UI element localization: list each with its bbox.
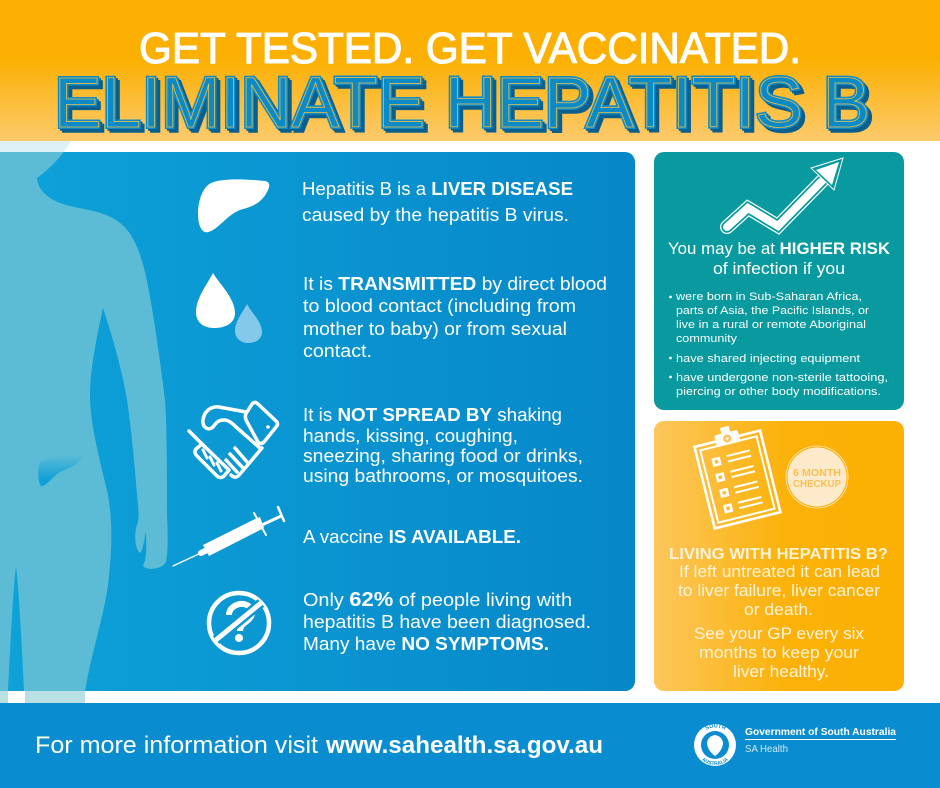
title: eliminate hepatitis B: ELIMINATE HEPATITIS B	[56, 66, 872, 145]
text: liver disease: Hepatitis B is a LIVER DISEASE	[302, 178, 573, 199]
badge: 6 month checkup	[786, 446, 848, 508]
logo: government of South Australia: Government of South Australia	[745, 726, 896, 738]
icon: handshake	[189, 402, 278, 478]
text: diagnosed	[303, 588, 591, 654]
text: living with hepatitis B: See your GP every six	[694, 625, 865, 643]
icon: no symptoms	[209, 593, 269, 653]
heading: higher risk: of infection if you	[713, 259, 845, 278]
text: living with hepatitis B	[669, 546, 888, 681]
body liver	[38, 455, 83, 486]
panel: main information	[0, 141, 635, 703]
logo: South Australia crest	[694, 724, 736, 766]
footer	[0, 703, 940, 788]
icon: blood drops	[196, 273, 262, 343]
list: risk factors: parts of Asia, the Pacific Islands, or	[676, 305, 869, 317]
text: living with hepatitis B: to liver failure, liver cancer	[678, 582, 881, 600]
logo: government of South Australia: SA Health	[745, 744, 788, 755]
headline: get tested: GET TESTED. GET VACCINATED.	[139, 24, 801, 73]
text: vaccine: A vaccine IS AVAILABLE.	[303, 526, 521, 547]
text: not spread by: using bathrooms, or mosquitoes.	[303, 465, 583, 486]
text: transmission: mother to baby) or from sexual	[303, 318, 567, 339]
text: liver disease: caused by the hepatitis B virus.	[302, 204, 569, 225]
text: transmission: to blood contact (including from	[303, 295, 576, 316]
text: living with hepatitis B: liver healthy.	[733, 663, 829, 681]
panel: living with hepatitis B	[654, 419, 904, 691]
text: more information: www.sahealth.sa.gov.au	[325, 732, 603, 759]
icon: clipboard	[692, 419, 780, 528]
text: not spread by: It is NOT SPREAD BY shaking	[303, 404, 562, 425]
text: not spread by: hands, kissing, coughing,	[303, 425, 518, 446]
text: living with hepatitis B: If left untreated it can lead	[679, 563, 880, 581]
title: eliminate hepatitis B: ELIMINATE HEPATITIS B	[54, 64, 870, 143]
logo: South Australia crest: AUSTRALIA	[702, 758, 728, 765]
icon: liver	[198, 179, 269, 232]
icon: syringe	[173, 507, 284, 566]
body silhouette	[0, 141, 168, 703]
list: risk factors	[669, 291, 888, 398]
text: diagnosed: Only 62% of people living with	[303, 588, 572, 611]
text: more information	[35, 732, 603, 759]
text: transmission	[303, 273, 607, 361]
text: more information: For more information visit	[35, 732, 318, 759]
heading: higher risk	[668, 239, 891, 278]
list: risk factors: have undergone non-sterile tattooing,	[676, 372, 888, 384]
text: not spread by: sneezing, sharing food or drinks,	[303, 445, 583, 466]
text: transmission: It is TRANSMITTED by direct blood	[303, 273, 607, 294]
list: risk factors: were born in Sub-Saharan Africa,	[675, 291, 862, 303]
text: not spread by	[303, 404, 583, 486]
title: eliminate hepatitis B: ELIMINATE HEPATITIS B	[58, 68, 874, 147]
text: living with hepatitis B: or death.	[744, 601, 813, 619]
list: risk factors: community	[676, 333, 738, 345]
text: diagnosed: hepatitis B have been diagnosed.	[303, 611, 591, 632]
badge: 6 month checkup: 6 MONTH	[793, 467, 841, 479]
title: eliminate hepatitis B: ELIMINATE HEPATITIS B	[54, 64, 870, 143]
icon: rising arrow	[727, 158, 843, 227]
logo: government of South Australia	[745, 726, 896, 755]
list: risk factors: live in a rural or remote Aboriginal	[676, 319, 866, 331]
header banner	[0, 0, 940, 147]
heading: higher risk: You may be at HIGHER RISK	[668, 239, 891, 258]
text: living with hepatitis B: LIVING WITH HEPATITIS B?	[669, 546, 888, 563]
text: liver disease	[302, 178, 573, 225]
list: risk factors: have shared injecting equipment	[676, 353, 860, 365]
list: risk factors: piercing or other body modifications.	[676, 386, 881, 398]
text: living with hepatitis B: months to keep your	[699, 644, 860, 662]
logo: South Australia crest: SOUTH	[705, 724, 726, 730]
text: diagnosed: Many have NO SYMPTOMS.	[303, 633, 549, 654]
badge: 6 month checkup: CHECKUP	[793, 478, 841, 490]
text: transmission: contact.	[303, 340, 372, 361]
panel: higher risk	[654, 152, 904, 410]
